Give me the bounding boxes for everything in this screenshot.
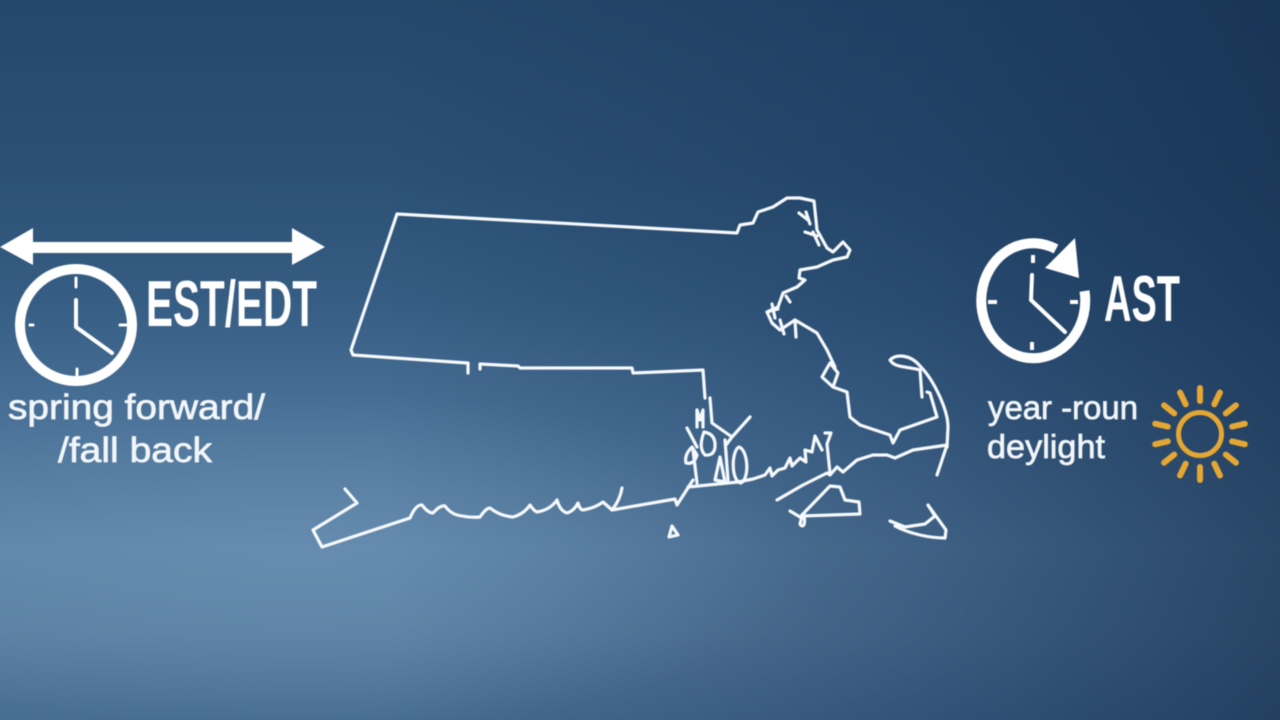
heading: EST/EDT: EST/EDT — [146, 267, 317, 340]
south coast west — [313, 480, 693, 547]
cape cod south coast — [777, 445, 947, 500]
north shore detail — [767, 212, 819, 337]
text: year-round daylight — [987, 389, 1138, 465]
icon: clock with arrow — [981, 238, 1085, 358]
icon: clock — [20, 269, 132, 381]
ellipse inlet — [733, 447, 747, 483]
heading: AST: AST — [1104, 262, 1180, 335]
island: Nantucket — [890, 505, 946, 538]
plymouth coast and cape cod — [822, 356, 948, 447]
south shore to buzzards bay — [688, 433, 831, 487]
north and west border — [351, 198, 850, 367]
island: Gosnold — [669, 526, 678, 537]
text: spring forward / fall back — [8, 388, 265, 470]
text: year-round daylight: year -roun — [988, 389, 1138, 426]
bay and river cluster — [686, 398, 750, 483]
panel: EST/EDT (left) — [0, 228, 325, 470]
panel: AST (right) — [981, 238, 1245, 480]
icon: sun — [1155, 388, 1245, 480]
southern border — [468, 363, 705, 398]
text: spring forward / fall back: /fall back — [58, 431, 213, 470]
arrow: two-way — [0, 228, 325, 265]
text: year-round daylight: deylight — [987, 428, 1105, 465]
island: Martha's Vineyard — [790, 486, 860, 526]
map: Massachusetts outline — [313, 198, 948, 547]
text: spring forward / fall back: spring forward/ — [8, 388, 265, 427]
